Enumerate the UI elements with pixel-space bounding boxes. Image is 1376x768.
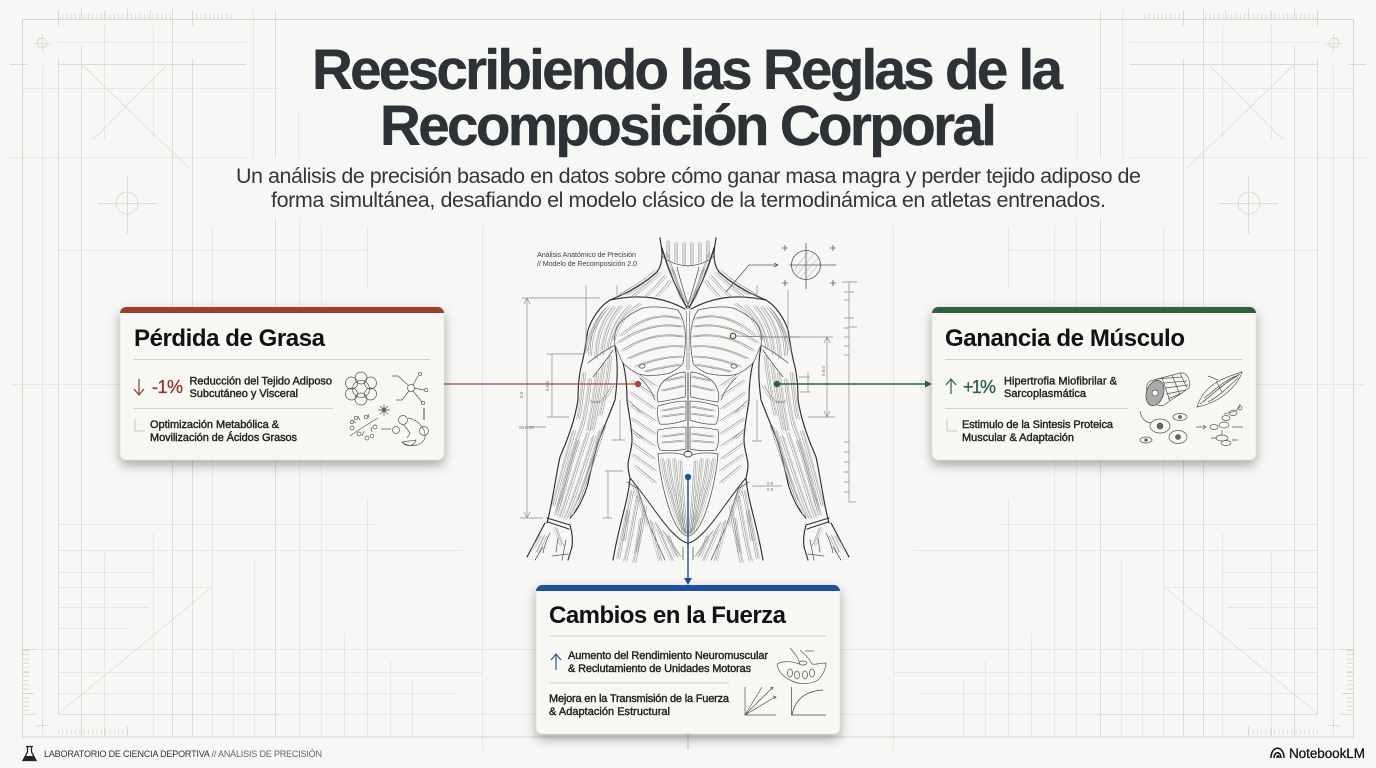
subtitle: Un análisis de precisión basado en datos sobre cómo ganar masa magra y perder tejido adiposo de <box>236 164 1141 188</box>
heading: fat loss: Pérdida de Grasa <box>134 325 326 352</box>
text: metabolic optimization <box>150 419 298 444</box>
text: force transmission: & Adaptación Estructural <box>549 706 670 718</box>
text: fat reduction: Reducción del Tejido Adiposo <box>190 376 332 388</box>
icon: force vector chart <box>745 687 776 715</box>
text: force transmission <box>549 693 730 718</box>
figure caption <box>537 250 637 268</box>
text: protein synthesis <box>962 419 1114 444</box>
arrow: up <box>946 379 956 394</box>
figure caption: Análisis Anatómico de Precisión <box>537 250 636 259</box>
dimension lines: 0.0 <box>767 481 774 486</box>
icon: neuromuscular junction <box>777 648 826 684</box>
dimension lines: 0.0.0 <box>545 380 550 391</box>
connector: fat loss <box>444 381 641 387</box>
icon: NotebookLM logo <box>1271 748 1284 758</box>
connector: strength <box>684 474 692 585</box>
icon: cells and molecules <box>346 372 428 446</box>
icon: corner arrow <box>947 419 957 431</box>
panel: fat loss <box>120 307 444 460</box>
text: force transmission: Mejora en la Transmisión de la Fuerza <box>549 693 730 705</box>
panel: strength changes <box>536 585 840 734</box>
heading: strength changes: Cambios en la Fuerza <box>549 602 787 629</box>
target diagram <box>726 243 836 292</box>
dimension lines: 00.0.00 <box>519 425 535 430</box>
title <box>312 38 1064 157</box>
stat: plus one percent: +1% <box>963 377 996 397</box>
text: fat reduction <box>190 376 332 400</box>
subtitle: forma simultánea, desafiando el modelo clásico de la termodinámica en atletas entrenados. <box>271 188 1106 212</box>
text: neuromuscular performance <box>568 650 768 675</box>
text: metabolic optimization: Optimización Metabólica & <box>150 419 280 431</box>
arrow: up <box>551 654 561 670</box>
text: metabolic optimization: Movilización de Ácidos Grasos <box>150 431 298 444</box>
dimension lines: 0.0.0 <box>821 365 826 376</box>
icon: corner arrow <box>135 419 145 431</box>
text: fat reduction: Subcutáneo y Visceral <box>190 388 298 400</box>
dimension lines: 0.0 <box>767 487 774 492</box>
icon: force curve chart <box>792 687 826 715</box>
title: Recomposición Corporal <box>380 94 997 157</box>
anatomical figure <box>527 238 849 563</box>
dimension lines: 0.0 <box>519 391 524 398</box>
text: neuromuscular performance: Aumento del Rendimiento Neuromuscular <box>568 650 768 662</box>
text: protein synthesis: Muscular & Adaptación <box>962 432 1074 444</box>
icon: muscle fibers and cells <box>1140 372 1243 446</box>
figure caption: // Modelo de Recomposición 2.0 <box>537 259 637 268</box>
text: neuromuscular performance: & Reclutamiento de Unidades Motoras <box>568 663 752 675</box>
text: hypertrophy: Sarcoplasmática <box>1004 388 1087 400</box>
connector: muscle gain <box>774 380 932 388</box>
arrow: down <box>134 379 144 395</box>
text: protein synthesis: Estimulo de la Sintesis Proteica <box>962 419 1114 431</box>
pectoral marker <box>730 333 800 339</box>
dimension lines <box>519 282 857 518</box>
title: Reescribiendo las Reglas de la <box>312 38 1064 101</box>
text: hypertrophy: Hipertrofia Miofibrilar & <box>1004 376 1118 388</box>
subtitle <box>236 164 1141 212</box>
icon: flask <box>23 746 36 760</box>
panel: muscle gain <box>932 307 1256 460</box>
heading: muscle gain: Ganancia de Músculo <box>945 325 1185 352</box>
stat: minus one percent: -1% <box>152 377 183 397</box>
text: hypertrophy <box>1004 376 1118 400</box>
brand label: NotebookLM <box>1289 746 1365 761</box>
footer label: LABORATORIO DE CIENCIA DEPORTIVA // ANÁLISIS DE PRECISIÓN <box>44 749 322 759</box>
